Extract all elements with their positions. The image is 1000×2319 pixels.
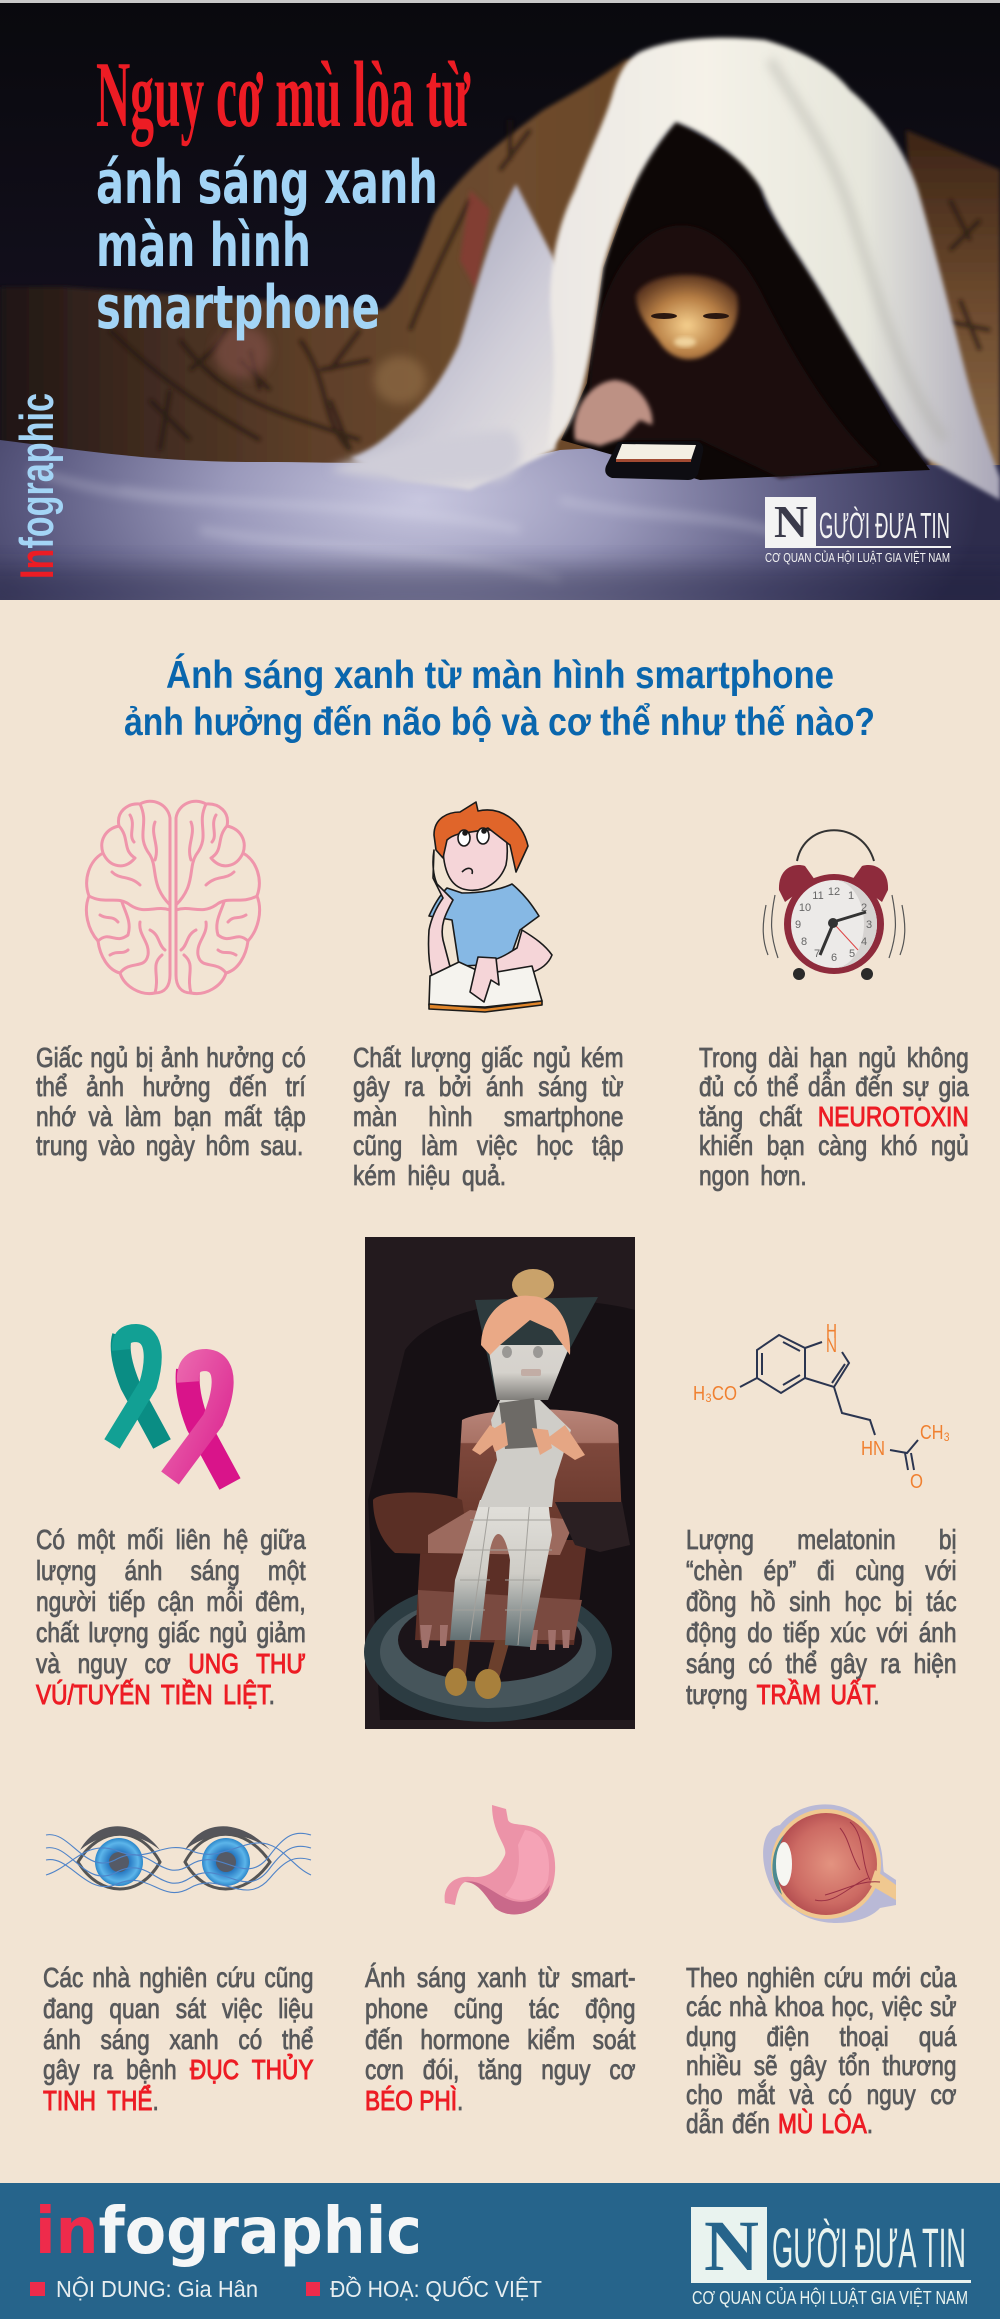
text block: neurotoxin: khiến bạn càng khó ngủ	[699, 1130, 969, 1161]
text block: blindness: nhiều sẽ gây tổn thương	[686, 2050, 957, 2081]
quilt left	[0, 60, 640, 480]
icon: brain	[86, 801, 260, 994]
title: smartphone	[96, 273, 380, 343]
text block: memory	[36, 1042, 306, 1162]
hero logo: Người Đưa Tin: CƠ QUAN CỦA HỘI LUẬT GIA VIỆT NAM	[765, 550, 950, 565]
text block: blindness: dụng điện thoại quá	[686, 2021, 957, 2052]
chair back	[456, 1409, 622, 1520]
text block: blindness	[686, 1962, 957, 2139]
icon: alarm clock: 4	[861, 936, 867, 948]
text block: study: Chất lượng giấc ngủ kém	[353, 1042, 624, 1073]
text block: cancer	[36, 1524, 306, 1710]
chair arm left	[373, 1492, 470, 1555]
pants	[450, 1500, 552, 1647]
icon: alarm clock: 12	[828, 886, 840, 898]
text block: study: gây ra bởi ánh sáng từ	[353, 1071, 624, 1102]
text block: depression: Lượng melatonin bị	[686, 1524, 957, 1555]
text block: obesity: Ánh sáng xanh từ smart-	[365, 1962, 636, 1993]
rug	[364, 1582, 612, 1722]
vertical label: Infographic: Infographic	[10, 393, 63, 579]
icon: eyes with blue light waves	[46, 1826, 311, 1893]
section heading: Ánh sáng xanh từ màn hình smartphone	[166, 653, 834, 697]
icon: melatonin molecule	[693, 1321, 950, 1493]
text block: cancer: VÚ/TUYẾN TIỀN LIỆT.	[36, 1679, 275, 1710]
title: màn hình	[96, 211, 311, 281]
dark interior	[561, 122, 930, 480]
section heading	[124, 653, 875, 744]
text block: obesity: cơn đói, tăng nguy cơ	[365, 2054, 636, 2085]
footer band	[0, 2183, 1000, 2319]
icon: alarm clock: 6	[831, 952, 837, 964]
text block: cancer: người tiếp cận mỗi đêm,	[36, 1586, 306, 1617]
title: Nguy cơ mù lòa từ	[96, 43, 471, 147]
text block: memory: trung vào ngày hôm sau.	[36, 1130, 303, 1161]
footer credits	[30, 2275, 542, 2302]
neck and face	[488, 1345, 570, 1400]
icon: alarm clock: 7	[814, 948, 820, 960]
text block: obesity: phone cũng tác động	[365, 1993, 636, 2024]
hero logo: Người Đưa Tin: N	[774, 496, 808, 547]
text block: depression: sáng có thể gây ra hiện	[686, 1648, 957, 1679]
text block: memory: Giấc ngủ bị ảnh hưởng có	[36, 1042, 306, 1073]
face	[636, 275, 738, 359]
text block: neurotoxin: đủ có thể dẫn đến sự gia	[699, 1071, 969, 1102]
chair arm right	[555, 1502, 630, 1552]
pink ribbon	[188, 1370, 230, 1484]
text block: cancer: Có một mối liên hệ giữa	[36, 1524, 306, 1555]
text block: blindness: cho mắt và có nguy cơ	[686, 2079, 957, 2110]
icon: alarm clock: 5	[849, 948, 855, 960]
arms	[472, 1425, 585, 1460]
icon: stomach	[445, 1805, 555, 1914]
text block: depression: tượng TRẦM UẤT.	[686, 1679, 880, 1710]
footer credits: ĐỒ HOẠ: QUỐC VIỆT	[330, 2275, 542, 2302]
icon: alarm clock: 3	[866, 919, 872, 931]
text block: cataract	[43, 1962, 314, 2116]
dark blob	[368, 1300, 635, 1720]
text block: blindness: Theo nghiên cứu mới của	[686, 1962, 957, 1993]
icon: melatonin molecule: N	[826, 1335, 837, 1357]
icon: awareness ribbons	[112, 1333, 230, 1484]
text block: obesity	[364, 1962, 636, 2116]
icon: alarm clock: 11	[812, 890, 824, 902]
text block: neurotoxin: tăng chất NEUROTOXIN	[699, 1101, 969, 1132]
text block: depression: đồng hồ sinh học bị tác	[686, 1586, 957, 1617]
text block: neurotoxin	[699, 1042, 970, 1192]
chair base	[415, 1540, 587, 1645]
text block: cataract: đang quan sát việc liệu	[43, 1993, 314, 2024]
icon: alarm clock	[763, 830, 905, 980]
text block: cataract: gây ra bệnh ĐỤC THỦY	[43, 2054, 314, 2085]
pillow	[330, 430, 520, 481]
text block: cataract: ánh sáng xanh có thể	[43, 2024, 314, 2055]
quilt right	[906, 130, 1000, 470]
text block: neurotoxin: Trong dài hạn ngủ không	[699, 1042, 969, 1073]
icon: melatonin molecule: HN	[861, 1438, 885, 1460]
text block: cancer: chất lượng giấc ngủ giảm	[36, 1617, 306, 1648]
icon: melatonin molecule: O	[910, 1471, 923, 1493]
light cone	[475, 1297, 598, 1400]
text block: obesity: BÉO PHÌ.	[365, 2085, 463, 2116]
section heading: ảnh hưởng đến não bộ và cơ thể như thế nào?	[124, 701, 875, 744]
text block: cataract: Các nhà nghiên cứu cũng	[43, 1962, 314, 1993]
icon: alarm clock: 10	[799, 902, 811, 914]
footer credits: NỘI DUNG: Gia Hân	[56, 2275, 258, 2302]
illustration panel: woman on armchair with tablet	[364, 1237, 635, 1729]
icon: tired student reading	[428, 802, 552, 1012]
hair	[481, 1296, 570, 1355]
hand	[574, 380, 652, 446]
text block: memory: nhớ và làm bạn mất tập	[36, 1101, 306, 1132]
text block: study: kém hiệu quả.	[353, 1160, 506, 1191]
text block: cancer: lượng ánh sáng một	[36, 1555, 306, 1586]
chair seat	[428, 1510, 575, 1555]
text block: depression: “chèn ép” đi cùng với	[686, 1555, 957, 1586]
text block: study: cũng làm việc học tập	[353, 1130, 624, 1161]
icon: melatonin molecule: H₃CO	[693, 1383, 737, 1405]
icon: alarm clock: 8	[801, 936, 807, 948]
text block: cataract: TINH THỂ.	[43, 2085, 159, 2116]
icon: eyeball cross-section	[763, 1804, 896, 1923]
icon: alarm clock: 2	[861, 902, 867, 914]
shins and shoes	[452, 1640, 510, 1682]
text block: depression: động do tiếp xúc với ánh	[686, 1617, 957, 1648]
footer logo: Người Đưa Tin: N	[704, 2206, 759, 2286]
title	[96, 43, 471, 343]
text block: memory: thể ảnh hưởng đến trí	[36, 1071, 306, 1102]
white sheet	[548, 38, 1000, 500]
tablet	[499, 1398, 539, 1449]
title: ánh sáng xanh	[96, 148, 438, 218]
text block: depression	[686, 1524, 957, 1710]
bun	[512, 1269, 554, 1301]
text block: blindness: dẫn đến MÙ LÒA.	[686, 2108, 873, 2139]
hero photo: girl using smartphone under blanket	[0, 0, 1000, 615]
icon: melatonin molecule: CH₃	[920, 1422, 950, 1444]
icon: melatonin molecule: H	[826, 1321, 837, 1343]
footer logo: Người Đưa Tin	[691, 2206, 971, 2308]
teal ribbon	[121, 1336, 162, 1444]
hands	[488, 1422, 552, 1455]
hero logo: Người Đưa Tin	[765, 496, 951, 565]
text block: blindness: các nhà khoa học, việc sử	[686, 1991, 957, 2022]
lower sheet	[350, 184, 575, 490]
text block: study	[353, 1042, 624, 1192]
text block: study: màn hình smartphone	[353, 1101, 624, 1132]
text block: neurotoxin: ngon hơn.	[699, 1160, 807, 1191]
icon: alarm clock: 1	[848, 890, 854, 902]
text block: obesity: đến hormone kiểm soát	[365, 2024, 636, 2055]
shirt	[478, 1400, 571, 1507]
hair	[589, 225, 880, 478]
phone	[605, 441, 703, 480]
footer wordmark: infographic: infographic	[35, 2195, 422, 2269]
icon: alarm clock: 9	[795, 919, 801, 931]
bed	[0, 440, 1000, 600]
text block: cancer: và nguy cơ UNG THƯ	[36, 1648, 306, 1679]
